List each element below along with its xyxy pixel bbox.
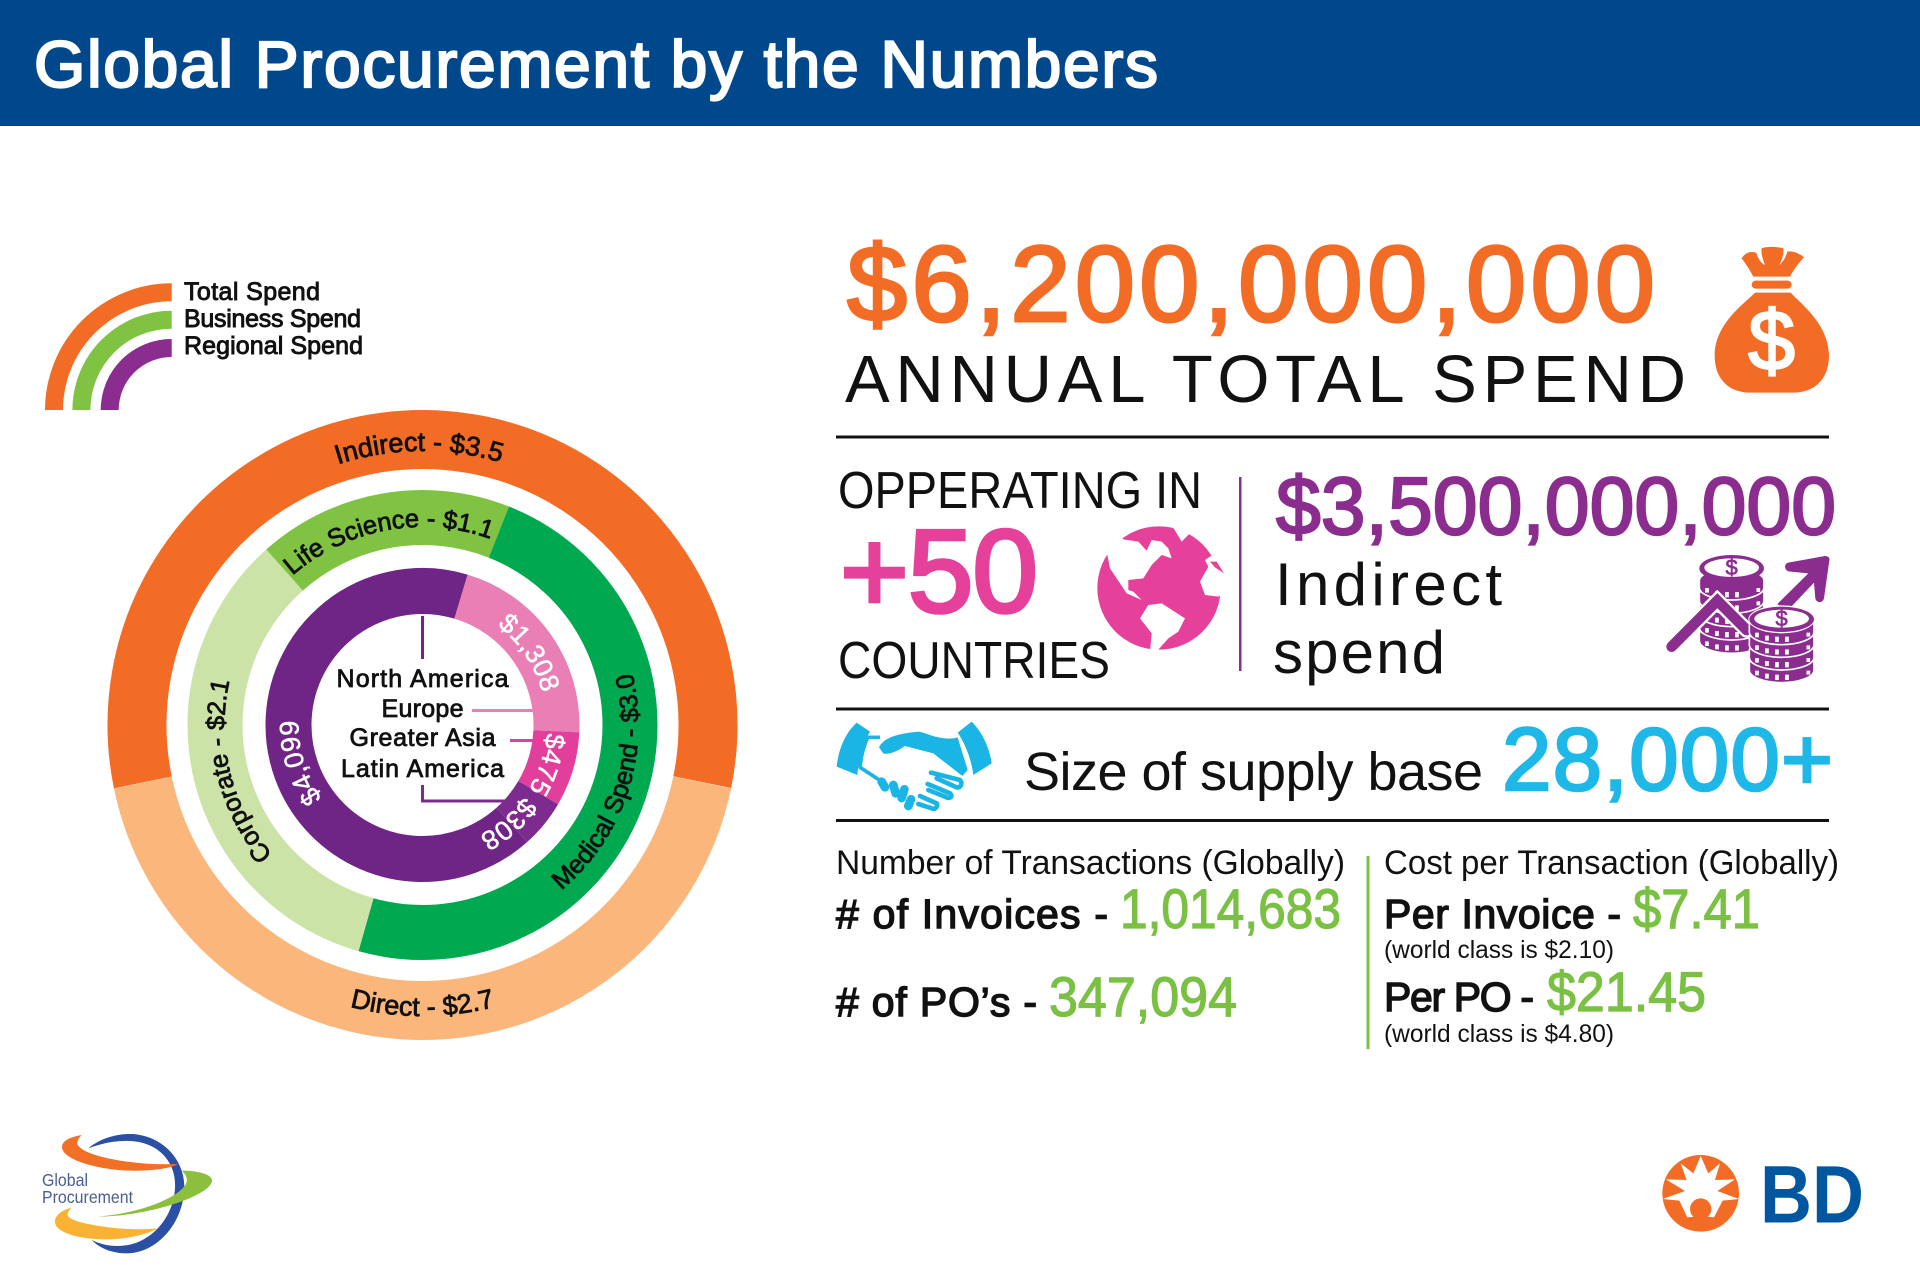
region names: Latin America <box>341 755 504 783</box>
divider <box>836 436 1829 438</box>
logo wordmark: Procurement <box>42 1187 133 1207</box>
icon: handshake <box>837 722 992 809</box>
legend labels: Regional Spend <box>184 332 363 360</box>
per invoice value: $7.41 <box>1633 877 1760 940</box>
icon: globe <box>1092 518 1230 652</box>
legend labels: Business Spend <box>184 305 361 333</box>
title: Global Procurement by the Numbers <box>34 27 1158 101</box>
panel: supply base <box>837 709 1833 809</box>
legend arcs <box>54 292 172 410</box>
divider <box>836 819 1829 822</box>
heading: Cost per Transaction (Globally) <box>1384 844 1839 882</box>
region names <box>336 665 509 783</box>
donut chart: spend breakdown <box>107 410 738 1040</box>
POs label: # of PO’s - <box>836 979 1037 1025</box>
logo wordmark <box>42 1170 133 1207</box>
spend label: spend <box>1273 619 1445 686</box>
per PO label: Per PO - <box>1384 974 1534 1020</box>
invoices label: # of Invoices - <box>836 891 1108 937</box>
panel: countries <box>838 462 1230 690</box>
icon: coins and arrow <box>1672 555 1829 683</box>
region names: North America <box>336 665 509 693</box>
region names: Europe <box>382 695 464 723</box>
annual total spend label: ANNUAL TOTAL SPEND <box>845 342 1686 417</box>
POs value: 347,094 <box>1049 965 1237 1028</box>
panel: indirect spend <box>1273 461 1836 686</box>
invoices value: 1,014,683 <box>1120 877 1341 940</box>
total spend labels <box>334 432 504 1017</box>
per invoice benchmark: (world class is $2.10) <box>1384 936 1614 964</box>
logo letters: BD <box>1760 1150 1864 1240</box>
icon: money bag <box>1715 247 1829 393</box>
icon: money bag: $ <box>1748 293 1795 387</box>
logo: Global Procurement <box>42 1134 212 1253</box>
per PO value: $21.45 <box>1547 960 1706 1023</box>
icon: coins and arrow: $ <box>1726 555 1738 580</box>
vertical divider <box>1366 856 1370 1049</box>
vertical divider <box>1239 477 1242 671</box>
heading: Number of Transactions (Globally) <box>836 844 1345 882</box>
logo swooshes <box>55 1134 212 1253</box>
ring: total spend <box>85 388 760 1062</box>
legend labels <box>184 278 363 360</box>
total spend labels: Indirect - $3.5 <box>334 432 504 464</box>
regional value labels: $308 <box>482 798 536 850</box>
leader lines <box>422 616 535 801</box>
business spend labels: Medical Spend - $3.0 <box>550 674 640 890</box>
ring: regional spend <box>233 536 612 914</box>
ring: business spend <box>130 432 715 1018</box>
panel: number of transactions <box>836 844 1345 1028</box>
icon: coins and arrow: $ <box>1776 606 1788 631</box>
per PO benchmark: (world class is $4.80) <box>1384 1020 1614 1048</box>
indirect spend figure: $3,500,000,000 <box>1276 461 1836 552</box>
panel: cost per transaction <box>1384 844 1839 1048</box>
countries label: COUNTRIES <box>838 632 1110 690</box>
business spend labels: Corporate - $2.1 <box>205 681 270 862</box>
legend <box>54 278 363 410</box>
annual total spend figure: $6,200,000,000 <box>847 223 1655 344</box>
business spend labels <box>205 510 640 890</box>
region names: Greater Asia <box>350 724 496 752</box>
legend labels: Total Spend <box>184 278 320 306</box>
+50 figure: +50 <box>840 506 1038 638</box>
business spend labels: Life Science - $1.1 <box>282 510 492 575</box>
per invoice label: Per Invoice - <box>1384 891 1621 937</box>
divider <box>836 708 1829 710</box>
indirect label: Indirect <box>1275 551 1502 618</box>
regional value labels <box>280 614 566 850</box>
header banner <box>0 0 1920 126</box>
regional value labels: $1,308 <box>500 614 559 691</box>
logo wordmark: Global <box>42 1170 88 1190</box>
supply base figure: 28,000+ <box>1502 709 1833 809</box>
operating in label: OPPERATING IN <box>838 462 1202 520</box>
regional value labels: $4,099 <box>280 722 320 806</box>
supply base label: Size of supply base <box>1024 742 1483 802</box>
logo: BD <box>1662 1150 1864 1240</box>
regional value labels: $475 <box>530 734 566 797</box>
total spend labels: Direct - $2.7 <box>352 988 491 1017</box>
logo mark <box>1662 1155 1739 1232</box>
